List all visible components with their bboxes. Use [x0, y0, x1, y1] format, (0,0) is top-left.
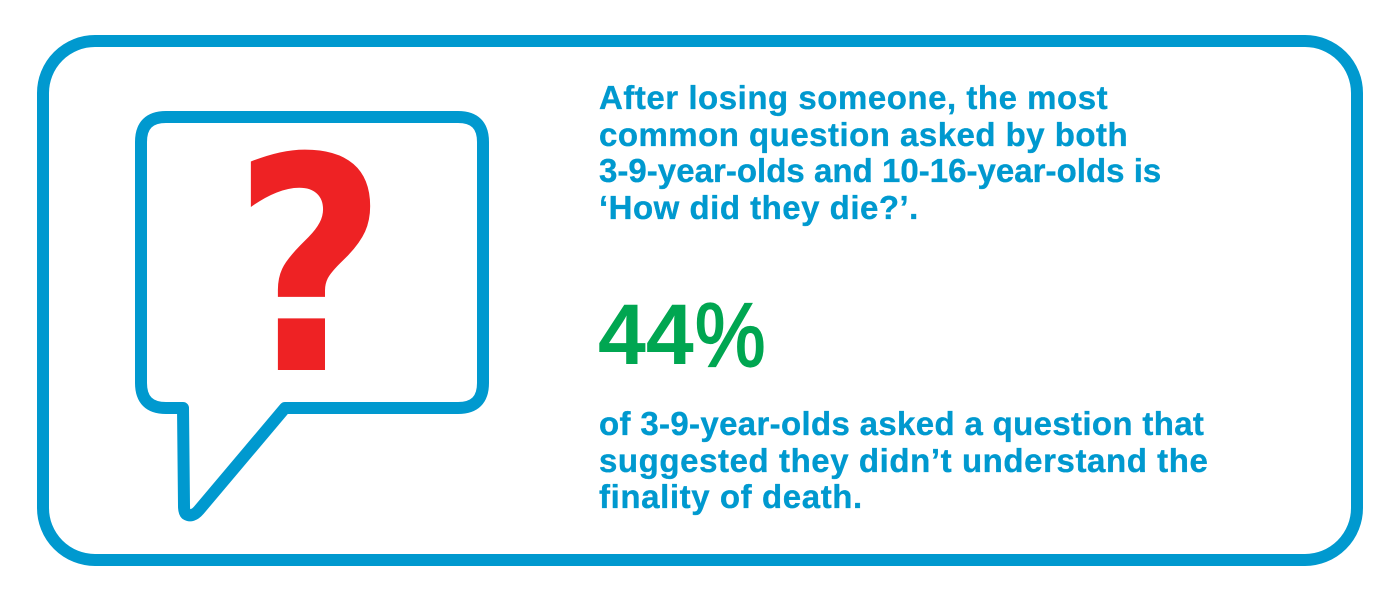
text block: most common question: After losing someone, the most [599, 79, 1108, 116]
text block: most common question [599, 79, 1161, 226]
text block: finality of death [599, 405, 1208, 516]
statistic: 44%: % [695, 286, 765, 386]
text block: finality of death: suggested they didn’t understand the [599, 442, 1208, 478]
text block: most common question: 3-9-year-olds and 10-16-year-olds is [599, 152, 1161, 189]
question mark: ? [232, 95, 388, 440]
text block: finality of death: of 3-9-year-olds asked a question that [599, 405, 1204, 442]
text block: most common question: ‘How did they die?’. [599, 188, 919, 226]
statistic: 44%: 44 [598, 287, 694, 383]
text block: most common question: common question asked by both [599, 116, 1128, 152]
statistic: 44% [598, 286, 765, 386]
text block: finality of death: finality of death. [599, 478, 863, 515]
